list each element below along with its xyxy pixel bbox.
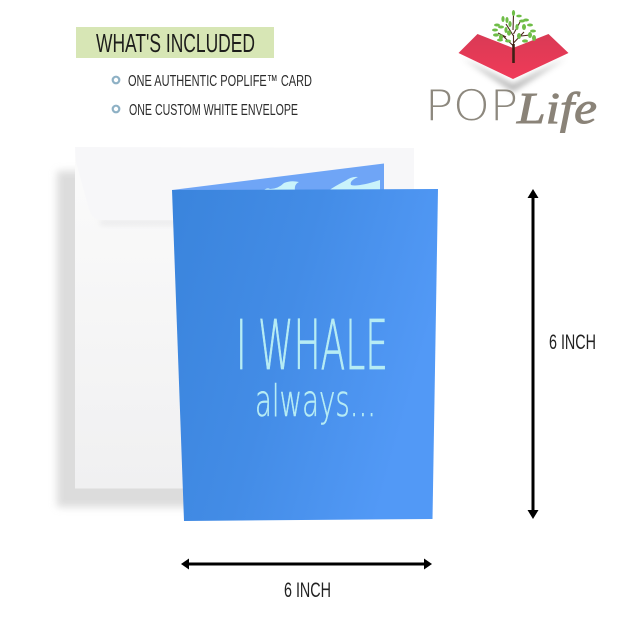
card front panel — [172, 189, 438, 521]
logo: pop life — [425, 10, 597, 133]
item: poplife card: ONE AUTHENTIC POPLIFE™ CARD — [128, 73, 312, 90]
item: white envelope: ONE CUSTOM WHITE ENVELOPE — [129, 102, 298, 119]
height label: 6 INCH — [549, 331, 596, 354]
logo wordmark POP: POP — [425, 81, 518, 130]
width dimension arrow — [181, 558, 432, 570]
envelope body — [75, 150, 414, 488]
card headline: I WHALE — [236, 306, 388, 386]
whale artwork peeking out — [263, 177, 380, 191]
card back panel — [172, 164, 384, 191]
envelope flap shadow — [100, 220, 390, 225]
card — [172, 164, 438, 521]
item: poplife card — [113, 73, 312, 90]
heading: what's included: WHAT'S INCLUDED — [96, 28, 255, 58]
envelope flap — [75, 147, 414, 220]
card sub-line: always... — [255, 376, 376, 427]
envelope shadow — [57, 171, 402, 507]
height dimension arrow — [528, 189, 538, 519]
list of included items — [113, 73, 312, 119]
logo tree — [492, 10, 536, 63]
logo red open book — [458, 34, 568, 79]
width label: 6 INCH — [284, 579, 331, 602]
item: white envelope — [113, 102, 298, 119]
envelope — [57, 147, 414, 507]
heading: what's included — [76, 27, 274, 58]
logo shadow — [462, 58, 566, 92]
logo wordmark Life: Life — [516, 84, 597, 133]
